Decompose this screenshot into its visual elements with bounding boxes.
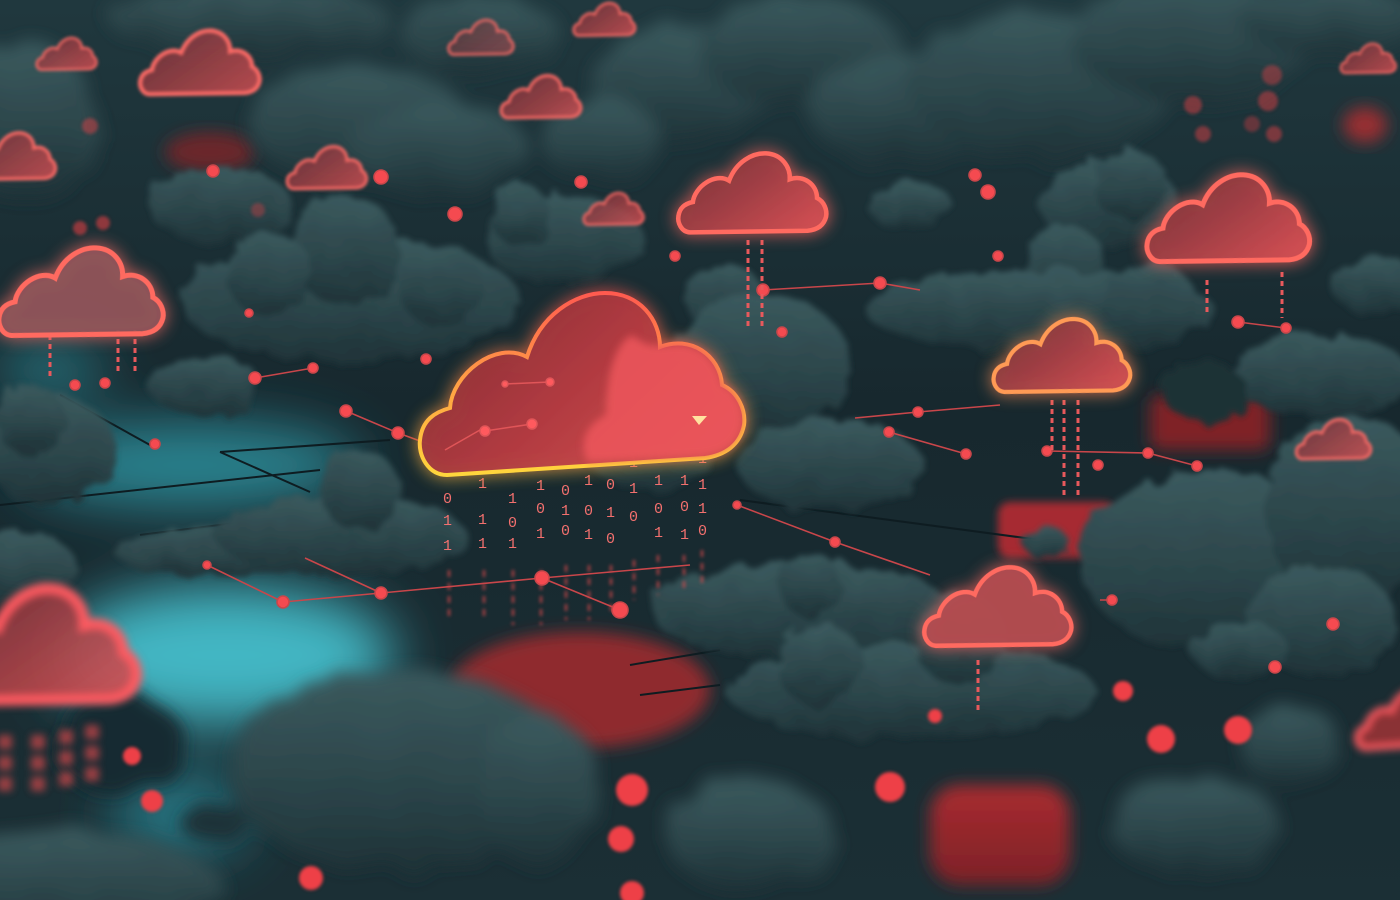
- circuit traces on the floor: [0, 395, 1040, 695]
- binary rain beneath the main cloud: 0: [508, 515, 517, 532]
- binary rain beneath the main cloud: 0: [561, 523, 570, 540]
- binary rain beneath the main cloud: 1: [536, 526, 545, 543]
- binary rain beneath the main cloud: 1: [680, 527, 689, 544]
- binary rain beneath the main cloud: 0: [606, 531, 615, 548]
- binary rain beneath the main cloud: 1: [654, 525, 663, 542]
- main glowing cloud: [420, 293, 744, 475]
- binary rain beneath the main cloud: 0: [680, 499, 689, 516]
- small distant red clouds: [0, 1, 1397, 463]
- red floor reflections: [165, 107, 1387, 885]
- binary rain beneath the main cloud: 0: [584, 503, 593, 520]
- blurred foreground dark clouds: [0, 670, 1340, 900]
- binary rain beneath the main cloud: 1: [654, 449, 663, 466]
- binary rain beneath the main cloud: 0: [606, 477, 615, 494]
- binary rain beneath the main cloud: 1: [443, 538, 452, 555]
- binary rain beneath the main cloud: 0: [536, 501, 545, 518]
- binary rain beneath the main cloud: 1: [606, 505, 615, 522]
- binary rain beneath the main cloud: [443, 449, 707, 555]
- main cloud inner nodes: [445, 378, 554, 450]
- binary rain beneath the main cloud: 1: [654, 473, 663, 490]
- foreground cloud data stream: [5, 725, 92, 795]
- binary rain beneath the main cloud: 1: [536, 478, 545, 495]
- binary rain beneath the main cloud: 1: [680, 473, 689, 490]
- binary rain beneath the main cloud: 1: [629, 481, 638, 498]
- binary rain beneath the main cloud: 1: [584, 527, 593, 544]
- binary rain beneath the main cloud: 1: [698, 501, 707, 518]
- binary rain beneath the main cloud: 0: [443, 491, 452, 508]
- binary rain beneath the main cloud: 0: [561, 483, 570, 500]
- binary rain beneath the main cloud: 0: [698, 523, 707, 540]
- main cloud spark: [692, 416, 707, 425]
- rain reflection under the main cloud: [449, 550, 702, 625]
- binary rain beneath the main cloud: 1: [508, 491, 517, 508]
- binary rain beneath the main cloud: 1: [443, 513, 452, 530]
- binary rain beneath the main cloud: 1: [478, 476, 487, 493]
- binary rain beneath the main cloud: 1: [584, 473, 593, 490]
- binary rain beneath the main cloud: 1: [629, 455, 638, 472]
- binary rain beneath the main cloud: 1: [478, 536, 487, 553]
- foreground dark clouds, lower right: [650, 415, 1400, 738]
- binary rain beneath the main cloud: 1: [698, 451, 707, 468]
- binary rain beneath the main cloud: 0: [654, 501, 663, 518]
- glowing cyan water area: [0, 342, 395, 855]
- network nodes and links: [70, 165, 1339, 673]
- binary rain beneath the main cloud: 0: [629, 509, 638, 526]
- binary rain beneath the main cloud: 1: [561, 503, 570, 520]
- binary rain beneath the main cloud: 1: [478, 512, 487, 529]
- binary rain beneath the main cloud: 1: [698, 477, 707, 494]
- binary rain beneath the main cloud: 1: [606, 451, 615, 468]
- inner cloud highlight: [584, 335, 742, 462]
- binary rain beneath the main cloud: 1: [508, 536, 517, 553]
- data streams below mid-size clouds: [50, 240, 1282, 710]
- large blurred foreground cloud, left: [0, 582, 141, 712]
- mid dark clouds: [0, 149, 1400, 608]
- background dark clouds, top band: [0, 0, 1400, 200]
- blurred foreground cloud, right edge: [1357, 690, 1400, 748]
- mid-size glowing red clouds: [0, 149, 1313, 653]
